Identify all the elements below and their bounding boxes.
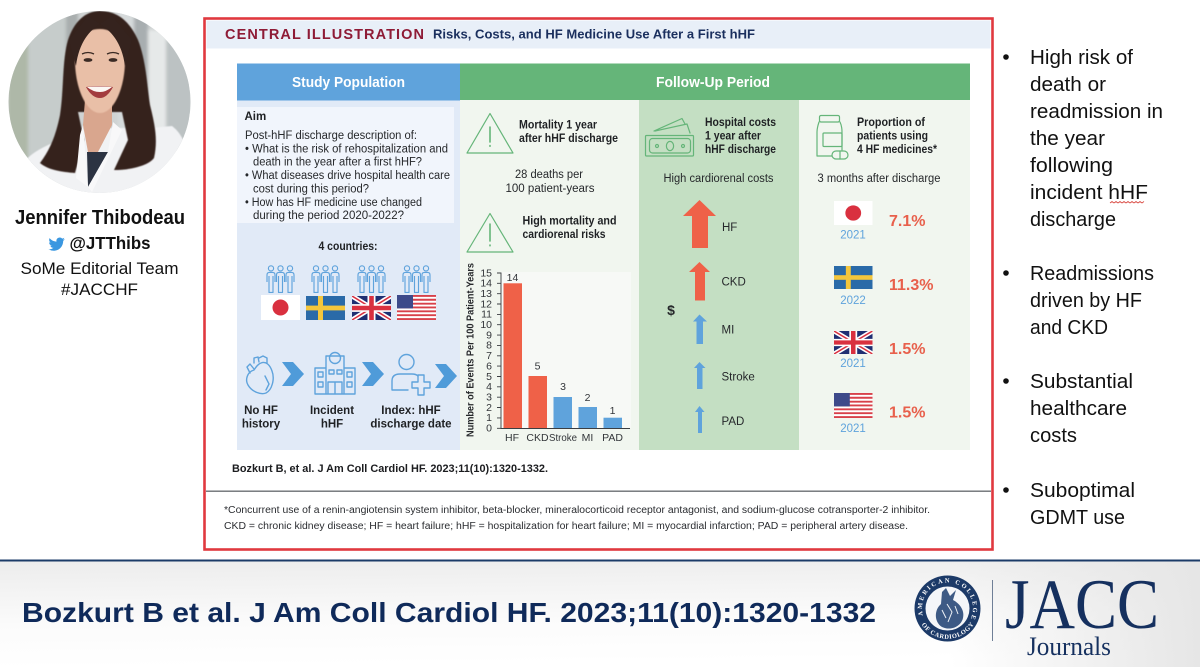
stat: United Kingdom xyxy=(834,331,925,370)
icon: twitter bird xyxy=(48,238,65,251)
arrow: stroke cost xyxy=(694,362,706,389)
arrow: HF cost xyxy=(683,200,716,248)
arrow: MI cost xyxy=(693,314,707,344)
text block: key takeaways: the year xyxy=(1030,127,1105,150)
arrow: to follow-up xyxy=(435,364,457,388)
y axis ticks: 14 xyxy=(480,278,492,290)
bar chart: events per 100 patient-years xyxy=(466,263,631,444)
arrow: to incident hHF xyxy=(282,362,304,386)
hair xyxy=(40,11,156,173)
value labels: 14 xyxy=(507,272,518,284)
icon: patient with cross xyxy=(392,354,430,395)
value labels xyxy=(507,272,616,417)
panel: follow-up period heading: Follow-Up Period xyxy=(656,75,770,91)
stat: United States: 1.5% xyxy=(889,404,925,422)
stat: deaths: 28 deaths per xyxy=(515,169,583,181)
panel: follow-up period heading xyxy=(460,64,970,100)
footer citation: Bozkurt B et al. J Am Coll Cardiol HF. 2023;11(10):1320-1332 xyxy=(22,597,876,628)
text block: key takeaways: GDMT use xyxy=(1030,506,1125,529)
heading: proportion of patients: 4 HF medicines* xyxy=(857,144,937,156)
y axis ticks: 12 xyxy=(480,298,492,310)
stat: United States: 2021 xyxy=(840,423,866,435)
heading: study population xyxy=(237,64,460,100)
panel: mortality xyxy=(460,100,639,450)
labels: patient journey: No HF xyxy=(244,405,278,417)
heading: mortality xyxy=(519,120,618,145)
y axis ticks: 13 xyxy=(480,288,492,300)
text block: aim: during the period 2020-2022? xyxy=(253,210,404,222)
panel: speaker profile xyxy=(8,10,192,299)
top xyxy=(87,152,108,187)
y axis ticks: 1 xyxy=(486,412,492,424)
text block: key takeaways: discharge xyxy=(1030,208,1116,231)
labels: patient journey: history xyxy=(242,418,281,430)
text block: aim: • How has HF medicine use changed xyxy=(245,197,422,209)
icons: patient groups xyxy=(267,266,430,292)
stat: Japan: 7.1% xyxy=(889,213,925,230)
heading: cardiorenal risks xyxy=(522,216,616,241)
category labels: Stroke xyxy=(549,432,577,444)
text block: aim: • What is the risk of rehospitalization and xyxy=(245,144,448,156)
citation: Bozkurt B, et al. J Am Coll Cardiol HF. 2023;11(10):1320-1332. xyxy=(232,463,548,475)
text block: aim xyxy=(237,107,454,223)
y axis ticks: 0 xyxy=(486,422,492,434)
logo: JACC Journals wordmark: Journals xyxy=(1027,632,1111,661)
footnote: *Concurrent use of a renin-angiotensin system inhibitor, beta-blocker, mineralocorticoid receptor antagonist, and sodium-glucose cotransporter-2 inhibitor. xyxy=(224,505,930,516)
hair parting xyxy=(74,29,126,66)
stat: United Kingdom: 1.5% xyxy=(889,341,925,358)
label: dollar axis: $ xyxy=(667,302,675,318)
labels: patient journey xyxy=(242,405,452,430)
y axis ticks: 6 xyxy=(486,360,492,372)
category labels: CKD xyxy=(526,432,549,444)
stat: United States xyxy=(834,393,925,435)
panel: HF medicine use xyxy=(799,100,970,450)
label: CKD: CKD xyxy=(722,276,746,288)
y axis ticks xyxy=(480,267,492,434)
text block: key takeaways: costs xyxy=(1030,424,1077,447)
label: HF: HF xyxy=(722,222,737,234)
stat: Sweden: 2022 xyxy=(840,295,866,307)
y axis ticks: 8 xyxy=(486,340,492,352)
heading: proportion of patients: patients using xyxy=(857,130,928,142)
flags: four countries xyxy=(261,295,436,320)
category labels: MI xyxy=(582,432,593,444)
role and hashtag xyxy=(20,260,178,299)
label: stroke: Stroke xyxy=(722,372,755,384)
subheading: high cardiorenal costs: High cardiorenal costs xyxy=(664,173,774,185)
text block: key takeaways: death or xyxy=(1030,73,1106,96)
panel: study population xyxy=(237,64,460,450)
y axis ticks: 10 xyxy=(480,319,492,331)
heading: proportion of patients: Proportion of xyxy=(857,117,925,129)
text block: key takeaways: Substantial xyxy=(1030,370,1133,393)
panel: footer band xyxy=(0,560,1200,667)
icon: medicine bottle xyxy=(817,116,848,159)
text block: aim: • What diseases drive hospital health care xyxy=(245,170,450,182)
panel: central illustration frame xyxy=(204,18,992,550)
text block: key takeaways: healthcare xyxy=(1030,397,1127,420)
collar xyxy=(76,122,120,187)
footnote xyxy=(224,505,930,532)
category labels: PAD xyxy=(602,432,623,444)
panel: hospital costs xyxy=(639,100,799,450)
heading: hospital costs: hHF discharge xyxy=(705,144,776,156)
icon: warning triangle xyxy=(467,214,513,252)
axis title: Number of Events Per 100 Patient-Years xyxy=(466,263,476,437)
y axis ticks: 2 xyxy=(486,402,492,414)
text block: key takeaways: High risk of xyxy=(1030,46,1133,69)
heading: 4 countries: 4 countries: xyxy=(318,241,378,253)
y axis ticks: 5 xyxy=(486,371,492,383)
text block: key takeaways: Suboptimal xyxy=(1030,479,1135,502)
footnote: CKD = chronic kidney disease; HF = heart failure; hHF = hospitalization for heart failure; MI = myocardial infarction; PAD = peripheral artery disease. xyxy=(224,521,908,532)
arrow: CKD cost xyxy=(689,262,710,300)
stat: Sweden xyxy=(834,266,933,307)
category labels: HF xyxy=(505,432,519,444)
role and hashtag: #JACCHF xyxy=(61,281,138,299)
smile xyxy=(86,86,113,98)
icon: hospital xyxy=(315,352,355,394)
stat: Japan: 2021 xyxy=(840,230,866,242)
heading: hospital costs: Hospital costs xyxy=(705,117,776,129)
text block: aim: cost during this period? xyxy=(253,184,369,196)
y axis ticks: 11 xyxy=(481,309,492,321)
face xyxy=(75,29,125,113)
icon: warning triangle xyxy=(467,114,513,153)
label: PAD: PAD xyxy=(722,416,744,428)
text block: key takeaways: incident hHF xyxy=(1030,181,1148,204)
heading: proportion of patients xyxy=(857,117,937,156)
heading: mortality: after hHF discharge xyxy=(519,133,618,145)
text block: key takeaways: following xyxy=(1030,154,1113,177)
y axis ticks: 9 xyxy=(486,329,492,341)
name: Jennifer Thibodeau xyxy=(15,207,185,229)
subtitle: Risks, Costs, and HF Medicine Use After a First hHF xyxy=(433,26,755,42)
heading: hospital costs: 1 year after xyxy=(705,130,761,142)
heading: cardiorenal risks: High mortality and xyxy=(522,216,616,228)
labels: patient journey: discharge date xyxy=(370,418,452,430)
stat: deaths xyxy=(506,169,595,195)
labels: patient journey: hHF xyxy=(321,418,343,430)
y axis ticks: 4 xyxy=(486,381,492,393)
text block: key takeaways: driven by HF xyxy=(1030,289,1142,312)
value labels: 5 xyxy=(535,360,541,372)
bars xyxy=(504,283,522,428)
heading: mortality: Mortality 1 year xyxy=(519,120,597,132)
category labels xyxy=(505,432,623,444)
stat: Japan xyxy=(834,201,925,242)
label: MI: MI xyxy=(722,324,734,336)
text block: aim: Post-hHF discharge description of: xyxy=(245,130,417,142)
role and hashtag: SoMe Editorial Team xyxy=(20,260,178,278)
logo: JACC Journals wordmark: JACC xyxy=(1005,566,1159,644)
coat xyxy=(26,126,192,194)
title: CENTRAL ILLUSTRATION xyxy=(225,27,424,43)
arrow: to discharge xyxy=(362,362,384,386)
logo: American College of Cardiology seal xyxy=(914,576,980,642)
eyes xyxy=(84,58,92,62)
y axis ticks: 7 xyxy=(486,350,492,362)
text block: aim: Aim xyxy=(244,111,266,123)
text block: key takeaways: Readmissions xyxy=(1030,262,1154,285)
text block: key takeaways: and CKD xyxy=(1030,316,1108,339)
text block: key takeaways: readmission in xyxy=(1030,100,1163,123)
subheading: 3 months after discharge: 3 months after discharge xyxy=(818,173,940,185)
photo: portrait of Jennifer Thibodeau xyxy=(8,10,192,194)
labels: patient journey: Index: hHF xyxy=(381,405,441,417)
neck xyxy=(83,100,112,152)
value labels: 3 xyxy=(560,381,566,393)
value labels: 1 xyxy=(610,405,616,417)
arrow: PAD cost xyxy=(695,406,704,433)
icon: heart xyxy=(247,356,273,394)
heading: study population: Study Population xyxy=(292,75,405,91)
text block: aim: death in the year after a first hHF? xyxy=(253,156,422,168)
twitter handle: @JTThibs xyxy=(70,233,151,253)
text block: key takeaways xyxy=(1003,46,1163,529)
logo: American College of Cardiology seal: AMERICAN COLLEGE xyxy=(918,578,978,620)
stat: Sweden: 11.3% xyxy=(889,277,933,294)
header band xyxy=(206,20,990,48)
stat: deaths: 100 patient-years xyxy=(506,183,595,195)
value labels: 2 xyxy=(585,392,591,404)
heading: cardiorenal risks: cardiorenal risks xyxy=(522,229,606,241)
stat: United Kingdom: 2021 xyxy=(840,358,866,370)
y axis ticks: 15 xyxy=(480,267,492,279)
labels: patient journey: Incident xyxy=(310,405,354,417)
heading: hospital costs xyxy=(705,117,776,156)
icon: banknotes xyxy=(646,118,694,156)
y axis ticks: 3 xyxy=(486,392,492,404)
logo: American College of Cardiology seal: OF CARDIOLOGY xyxy=(922,622,974,639)
